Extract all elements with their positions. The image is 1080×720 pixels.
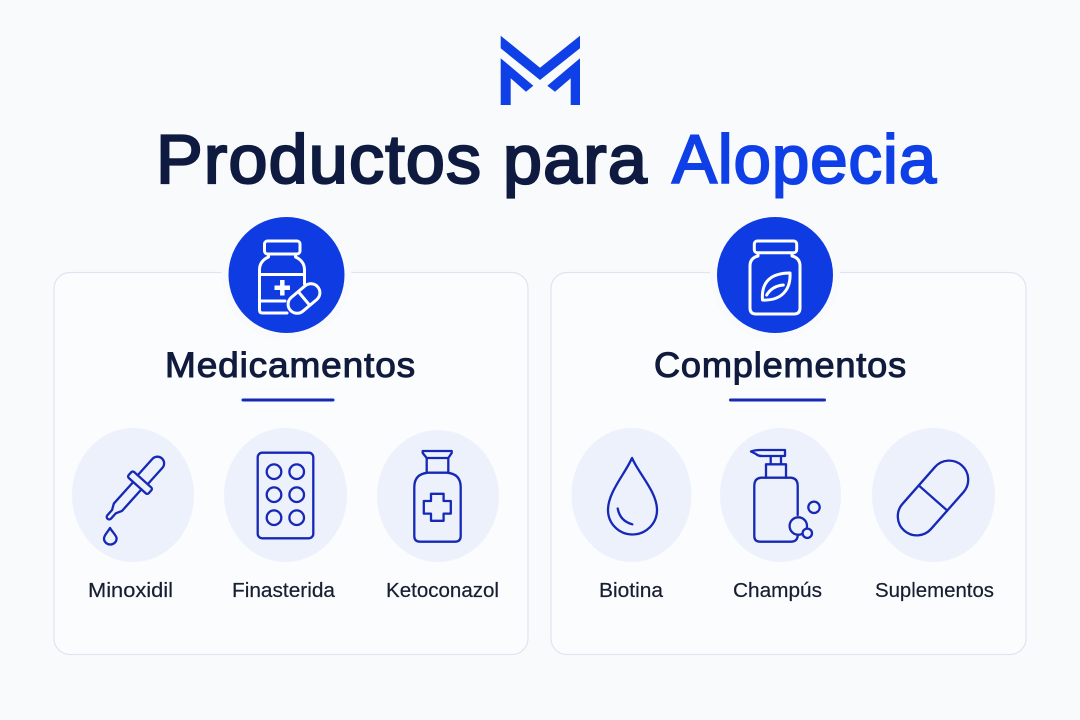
heading underline	[729, 398, 826, 402]
item: Minoxidil: Minoxidil	[88, 579, 173, 602]
item: Ketoconazol: Ketoconazol	[386, 579, 499, 602]
header badge gap	[222, 210, 352, 340]
logo: M mark	[501, 36, 580, 105]
icon: capsule	[890, 453, 976, 543]
item: Biotina	[572, 428, 692, 602]
item: Minoxidil	[72, 428, 194, 602]
item: Champús	[720, 428, 841, 602]
title: Alopecia	[672, 121, 937, 198]
icon: pump bottle with bubbles	[751, 450, 820, 542]
icon: dropper	[98, 449, 172, 544]
icon: drop	[608, 458, 657, 534]
title: Productos para	[156, 121, 648, 198]
heading: Complementos: Complementos	[654, 346, 907, 385]
panel frame	[54, 272, 528, 654]
item: Ketoconazol	[377, 430, 499, 602]
heading: Medicamentos: Medicamentos	[165, 346, 416, 385]
title	[156, 121, 937, 198]
item: Champús: Champús	[733, 579, 822, 602]
icon: bottle with cross	[414, 451, 461, 542]
icon: blister pack	[258, 453, 313, 538]
icon: jar with leaf	[717, 217, 833, 333]
item: Suplementos: Suplementos	[875, 579, 994, 602]
item: Finasterida	[224, 428, 347, 602]
item: Biotina: Biotina	[599, 579, 664, 602]
item: Suplementos	[872, 428, 995, 602]
item: Finasterida: Finasterida	[232, 579, 336, 602]
heading underline	[242, 398, 334, 402]
panel: Medicamentos	[54, 210, 528, 654]
icon: medicine bottle with pill	[228, 217, 344, 333]
panel frame	[551, 272, 1026, 654]
header badge gap	[710, 210, 840, 340]
panel: Complementos	[551, 210, 1026, 654]
